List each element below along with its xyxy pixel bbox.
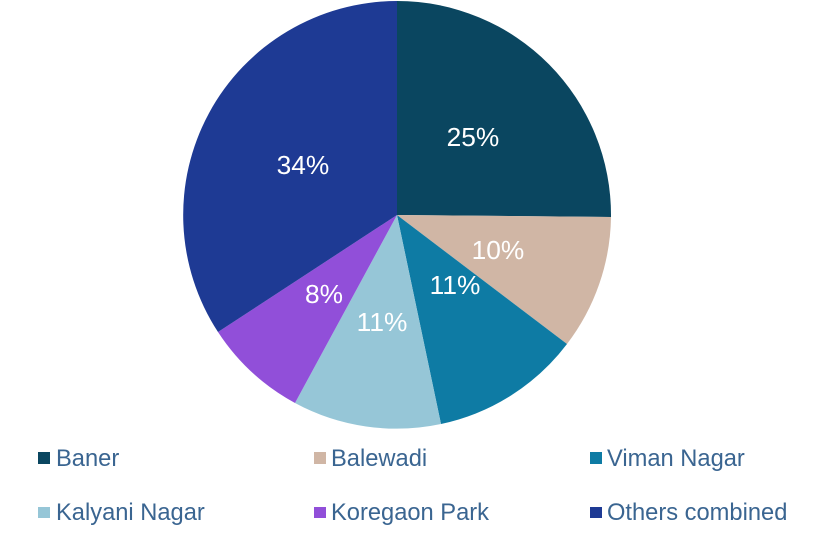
slice: Others combined 34%	[183, 1, 397, 332]
legend item: Viman Nagar: Viman Nagar	[607, 446, 745, 472]
value labels	[277, 122, 524, 337]
slice: Koregaon Park 8%	[218, 215, 397, 403]
legend item: Baner: Baner	[56, 446, 119, 472]
slice: Balewadi 10%	[397, 215, 611, 344]
slice: Baner 25%	[397, 1, 611, 217]
label: 10%: 10%	[472, 235, 524, 265]
label: 25%: 25%	[447, 122, 499, 152]
slice: Kalyani Nagar 11%	[295, 215, 441, 429]
slice: Viman Nagar 11%	[397, 215, 567, 424]
label: 34%: 34%	[277, 150, 329, 180]
legend	[38, 446, 787, 526]
legend item: Balewadi: Balewadi	[331, 446, 427, 472]
label: 11% Kalyani Nagar: 11%	[357, 307, 407, 337]
label: 11% Viman Nagar: 11%	[430, 270, 480, 300]
legend item: Others combined: Others combined	[607, 500, 787, 526]
legend item: Kalyani Nagar: Kalyani Nagar	[56, 500, 205, 526]
pie chart	[183, 1, 611, 429]
legend item: Koregaon Park: Koregaon Park	[331, 500, 489, 526]
label: 8%: 8%	[305, 279, 343, 309]
